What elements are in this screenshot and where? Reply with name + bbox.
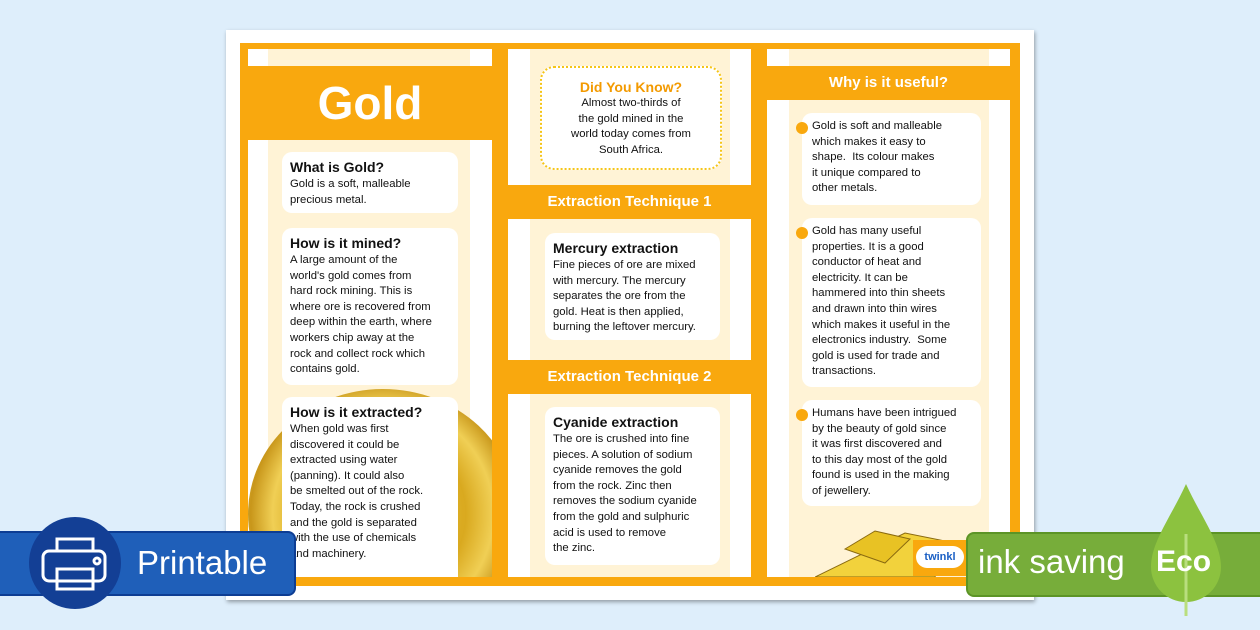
orange frame [240, 43, 1020, 586]
heading: extraction technique 1 [508, 185, 751, 219]
card: jewellery: to this day most of the gold [812, 454, 947, 466]
card: cyanide extraction: from the gold and sulphuric [553, 511, 689, 523]
card: useful properties: electricity. It can be [812, 272, 908, 284]
paper sheet [226, 30, 1034, 600]
card: mercury extraction: Fine pieces of ore are mixed [553, 259, 696, 271]
heading: why is it useful: Why is it useful? [829, 74, 948, 91]
card: jewellery: of jewellery. [812, 485, 871, 497]
card: how is it mined: How is it mined? [290, 235, 401, 251]
card: cyanide extraction: The ore is crushed into fine [553, 433, 689, 445]
card: soft and malleable: which makes it easy to [812, 136, 926, 148]
card: useful properties: and drawn into thin wires [812, 303, 937, 315]
card: useful properties: properties. It is a good [812, 241, 924, 253]
card: how is it extracted: and machinery. [290, 548, 366, 560]
card: how is it extracted: extracted using water [290, 454, 397, 466]
card: cyanide extraction: removes the sodium cyanide [553, 495, 697, 507]
card: how is it mined: deep within the earth, where [290, 316, 432, 328]
card: what is gold: Gold is a soft, malleable [290, 178, 411, 190]
card: cyanide extraction [545, 407, 720, 565]
callout: did you know: Did You Know? [580, 79, 682, 95]
card: what is gold: What is Gold? [290, 159, 384, 175]
card: cyanide extraction: the zinc. [553, 542, 595, 554]
logo: twinkl [913, 540, 967, 576]
card: mercury extraction: with mercury. The mercury [553, 275, 686, 287]
badge: ink saving eco [966, 484, 1260, 616]
card: jewellery: found is used in the making [812, 469, 950, 481]
heading: extraction technique 1: Extraction Technique 1 [548, 193, 711, 210]
card: how is it extracted: and the gold is separated [290, 517, 417, 529]
card: how is it extracted: (panning). It could also [290, 470, 404, 482]
card: soft and malleable: Gold is soft and malleable [812, 120, 942, 132]
card: how is it extracted: be smelted out of the rock. [290, 485, 423, 497]
card: how is it mined: where ore is recovered from [290, 301, 431, 313]
card: soft and malleable [802, 113, 981, 205]
card: how is it extracted: How is it extracted? [290, 404, 422, 420]
heading: extraction technique 2: Extraction Technique 2 [548, 368, 711, 385]
callout: did you know: the gold mined in the [579, 113, 683, 125]
card: how is it mined: workers chip away at the [290, 332, 414, 344]
heading: Gold: Gold [318, 77, 422, 129]
card: how is it mined: rock and collect rock which [290, 348, 425, 360]
badge: printable: Printable [137, 544, 267, 581]
card: jewellery: it was first discovered and [812, 438, 942, 450]
gold coin image [248, 389, 518, 630]
badge: printable [0, 517, 296, 609]
card: what is gold [282, 152, 458, 213]
card: cyanide extraction: cyanide removes the gold [553, 464, 682, 476]
card: mercury extraction: Mercury extraction [553, 240, 678, 256]
icon: gold bars [815, 530, 942, 577]
heading: Gold [248, 66, 492, 140]
card: soft and malleable: other metals. [812, 182, 877, 194]
badge: ink saving eco: ink saving [978, 543, 1125, 580]
card: mercury extraction: gold. Heat is then applied, [553, 306, 684, 318]
icon: leaf [1151, 484, 1221, 616]
card: cyanide extraction: acid is used to remove [553, 527, 666, 539]
card: mercury extraction: burning the leftover mercury. [553, 321, 696, 333]
callout: did you know: Almost two-thirds of [581, 97, 681, 109]
callout: did you know: world today comes from [571, 128, 691, 140]
card: jewellery: by the beauty of gold since [812, 423, 946, 435]
heading: why is it useful [767, 66, 1010, 100]
card: useful properties: transactions. [812, 365, 876, 377]
card: how is it mined [282, 228, 458, 385]
card: how is it mined: world's gold comes from [290, 270, 411, 282]
card: how is it extracted: discovered it could be [290, 439, 399, 451]
card: useful properties: conductor of heat and [812, 256, 921, 268]
card: useful properties: electronics industry. Some [812, 334, 947, 346]
card: cyanide extraction: pieces. A solution of sodium [553, 449, 692, 461]
card: how is it mined: contains gold. [290, 363, 360, 375]
logo: twinkl: twinkl [924, 551, 956, 563]
panel: column 2 [508, 49, 751, 577]
card: jewellery [802, 400, 981, 506]
card: how is it extracted: Today, the rock is crushed [290, 501, 420, 513]
card: useful properties: gold is used for trade and [812, 350, 940, 362]
card: useful properties: Gold has many useful [812, 225, 921, 237]
callout: did you know [540, 66, 722, 170]
card: soft and malleable: shape. Its colour makes [812, 151, 934, 163]
card: useful properties: hammered into thin sheets [812, 287, 945, 299]
card: how is it extracted: When gold was first [290, 423, 389, 435]
card: mercury extraction: separates the ore from the [553, 290, 686, 302]
card: how is it mined: A large amount of the [290, 254, 397, 266]
card: what is gold: precious metal. [290, 194, 367, 206]
card: jewellery: Humans have been intrigued [812, 407, 956, 419]
card: mercury extraction [545, 233, 720, 340]
card: useful properties: which makes it useful in the [812, 319, 950, 331]
panel: column 1 [248, 49, 492, 577]
card: how is it extracted [282, 397, 458, 577]
badge: ink saving eco: Eco [1156, 545, 1211, 578]
card: cyanide extraction: Cyanide extraction [553, 414, 678, 430]
icon: printer [29, 517, 121, 609]
card: how is it extracted: with the use of chemicals [290, 532, 416, 544]
panel: column 3 [767, 49, 1010, 577]
card: how is it mined: hard rock mining. This is [290, 285, 412, 297]
card: cyanide extraction: from the rock. Zinc then [553, 480, 672, 492]
card: useful properties [802, 218, 981, 387]
card: soft and malleable: it unique compared to [812, 167, 921, 179]
heading: extraction technique 2 [508, 360, 751, 394]
callout: did you know: South Africa. [599, 144, 663, 156]
